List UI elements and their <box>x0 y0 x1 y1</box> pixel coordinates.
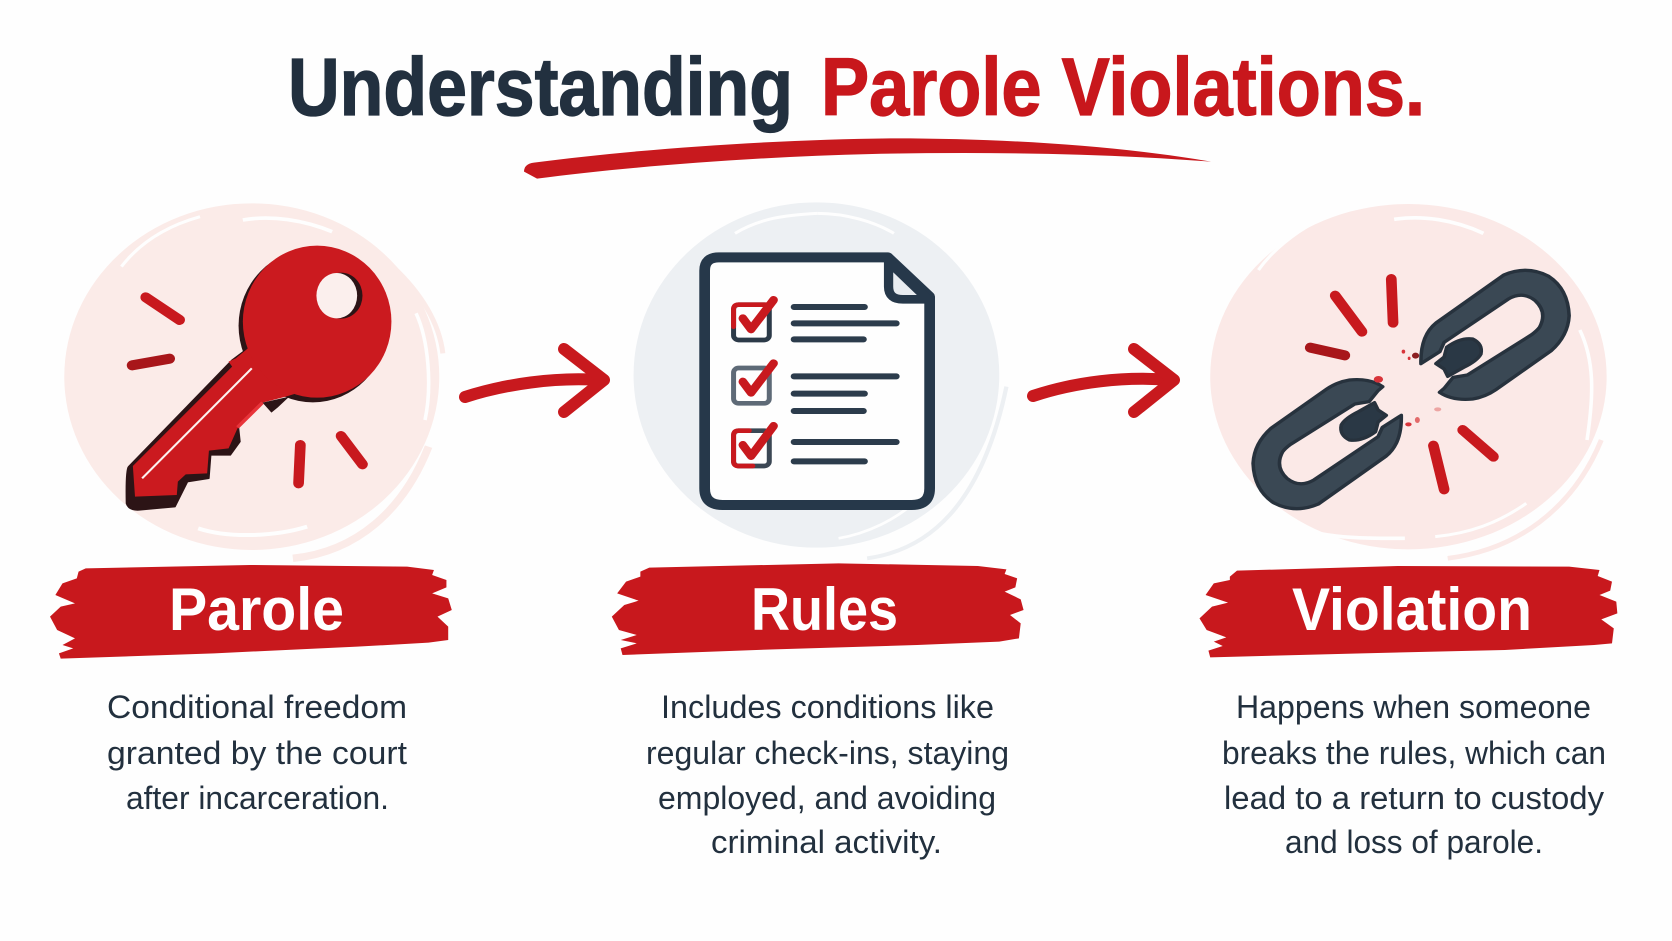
text block: violation: Happens when someone <box>1236 689 1591 725</box>
circle background: violation <box>1210 204 1607 558</box>
heading: rules: Rules <box>751 576 898 643</box>
checkbox 2 <box>734 363 774 403</box>
text block: parole: Conditional freedom <box>107 689 407 725</box>
icon: spark dots <box>1374 350 1441 426</box>
text block: rules: regular check-ins, staying <box>646 735 1009 771</box>
label bar: violation <box>1199 566 1617 657</box>
arrow: rules to violation <box>1033 349 1174 412</box>
label bar: rules <box>612 563 1024 655</box>
label bar: parole <box>50 565 452 659</box>
icon: key sparkle rays <box>132 297 362 483</box>
icon: broken chain link upper <box>1421 270 1569 399</box>
text block: rules <box>646 689 1009 860</box>
text block: rules: Includes conditions like <box>661 689 994 725</box>
text block: rules: criminal activity. <box>711 824 942 860</box>
title underline brush stroke <box>524 138 1211 179</box>
icon: checklist document <box>705 257 930 505</box>
text block: parole: granted by the court <box>107 735 407 771</box>
panel: parole <box>50 203 452 659</box>
icon: broken chain link lower <box>1253 380 1401 509</box>
title: Understanding <box>288 42 793 133</box>
text block: violation: breaks the rules, which can <box>1222 735 1606 771</box>
checkbox 1 <box>734 300 774 340</box>
text block: parole: after incarceration. <box>126 780 389 816</box>
heading: parole: Parole <box>169 576 344 643</box>
icon: key <box>126 246 391 510</box>
text block: parole <box>107 689 407 816</box>
panel: violation <box>1199 204 1617 657</box>
text block: violation <box>1222 689 1606 860</box>
checkbox 3 <box>734 426 774 466</box>
title <box>288 42 1425 133</box>
circle background: rules <box>634 202 1006 558</box>
arrow: parole to rules <box>465 349 604 412</box>
text block: violation: and loss of parole. <box>1285 824 1543 860</box>
panel: rules <box>612 202 1024 655</box>
checklist lines <box>794 307 896 461</box>
icon: break sparks <box>1310 279 1493 489</box>
heading: violation: Violation <box>1292 576 1532 643</box>
text block: violation: lead to a return to custody <box>1224 780 1604 816</box>
text block: rules: employed, and avoiding <box>658 780 996 816</box>
title: Parole Violations. <box>821 42 1425 133</box>
circle background: parole <box>64 203 443 558</box>
